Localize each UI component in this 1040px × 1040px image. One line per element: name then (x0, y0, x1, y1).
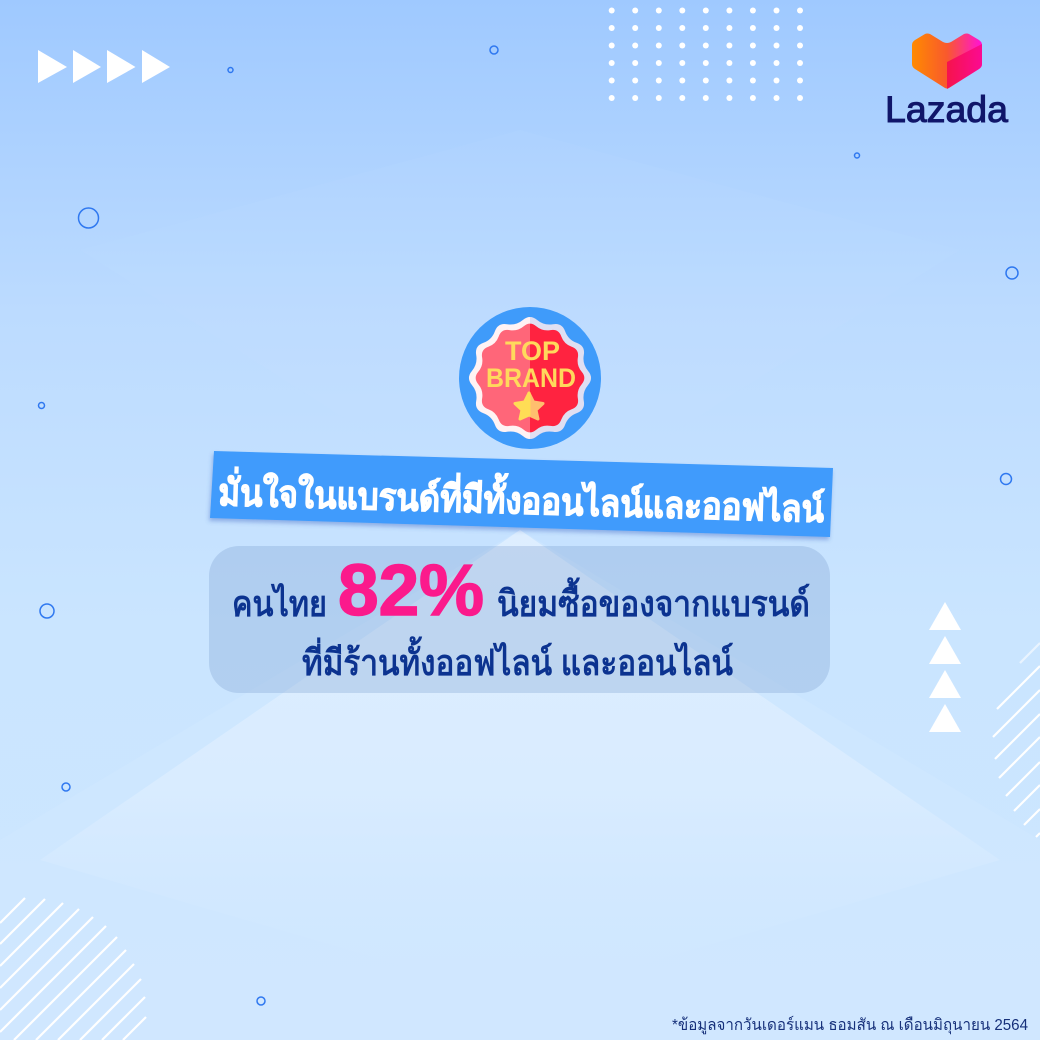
text: second line: ที่มีร้านทั้งออฟไลน์ และออนไลน์ (302, 636, 733, 683)
icon: top brand badge: TOP (505, 336, 560, 366)
icon: four white up-pointing triangles (929, 602, 961, 732)
icon: four white right-pointing arrows (38, 50, 170, 83)
icon: top brand badge (459, 307, 601, 449)
icon: top brand badge: BRAND (486, 363, 576, 393)
text: first line label: คนไทย (232, 582, 327, 624)
hatch lines: right edge (993, 643, 1040, 837)
Lazada logo (885, 34, 1008, 130)
panel: statistic (209, 546, 830, 693)
icon: star (515, 393, 543, 419)
ribbon heading: มั่นใจในแบรนด์ที่มีทั้งออนไลน์และออฟไลน์ (218, 465, 825, 530)
text: first line remainder: นิยมซื้อของจากแบรนด์ (497, 577, 810, 624)
source footnote: *ข้อมูลจากวันเดอร์แมน ธอมสัน ณ เดือนมิถุนายน 2564 (672, 1015, 1028, 1035)
ribbon heading (210, 451, 833, 537)
hatch lines: bottom left (0, 898, 146, 1040)
statistic: 82%: 82% (338, 551, 484, 631)
dot grid decoration (609, 8, 803, 101)
icon: Lazada heart box (912, 34, 982, 89)
wordmark: Lazada: Lazada (885, 89, 1008, 130)
